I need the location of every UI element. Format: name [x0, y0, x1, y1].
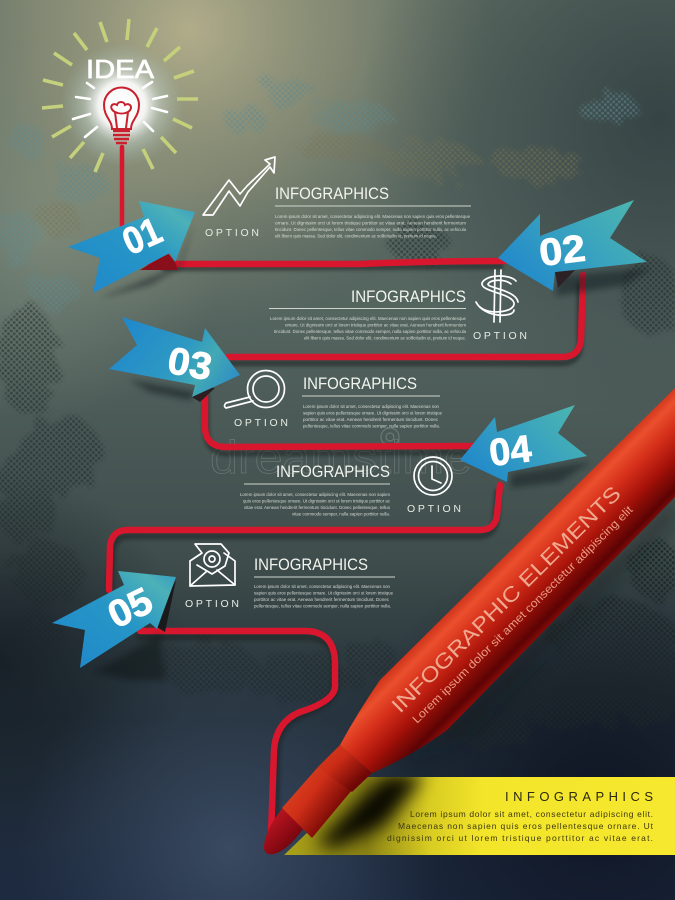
body text: elit libero quis massa. Sed dolor elit, condimentum ac sollicitudin ut, pretium id neque.: [275, 234, 437, 240]
body text: tincidunt. Donec pellentesque, tellus vitae commodo semper, nulla sapien porttitor nulla, ac vehicula: [275, 227, 466, 233]
idea word: IDEA: [86, 54, 155, 84]
arrow 05: 05: [102, 580, 159, 637]
arrow 04: [460, 405, 590, 488]
body text: vitae commodo semper, nulla sapien porttitor nulla.: [292, 512, 390, 518]
body text: [240, 492, 390, 518]
body text: [303, 404, 442, 430]
body text: Lorem ipsum dolor sit amet, consectetur adipiscing elit. Maecenas non: [254, 584, 390, 590]
body text: ornare. Ut dignissim orci ut lorem tristique porttitor ac vitae erat. Aenean hendrerit fermentum: [285, 322, 466, 328]
body text: tincidunt. Donec pellentesque, tellus vitae commodo semper, nulla sapien porttitor nulla, ac vehicula: [274, 329, 466, 335]
callout: yellow band: [284, 775, 675, 855]
arrow 01: [68, 201, 195, 298]
body text: sapien quis eros pellentesque ornare. Ut dignissim orci ut lorem tristique: [303, 410, 442, 416]
panel: option 05: [185, 544, 395, 610]
body text: sapien quis eros pellentesque ornare. Ut dignissim orci ut lorem tristique: [254, 590, 393, 596]
marker pen: [264, 388, 675, 854]
option label: OPTION: [407, 503, 461, 515]
pen nib: [264, 808, 303, 854]
pen lower barrel: [282, 767, 352, 838]
pen subtitle: Lorem ipsum dolor sit amet consectetur adipiscing elit: [411, 504, 636, 726]
option label: OPTION: [205, 227, 259, 239]
panel: option 03: [224, 370, 442, 430]
white rays: [73, 82, 167, 137]
icon: rising arrow: [203, 157, 275, 215]
idea light bulb: [42, 19, 198, 172]
line from bulb: [120, 147, 124, 230]
body text: Lorem ipsum dolor sit amet, consectetur adipiscing elit. Maecenas non sapien: [240, 492, 390, 498]
heading: INFOGRAPHICS: [254, 556, 368, 574]
heading: INFOGRAPHICS: [303, 375, 417, 393]
body text: Lorem ipsum dolor sit amet, consectetur adipiscing elit. Maecenas non: [303, 404, 439, 410]
icon: clock: [414, 457, 452, 495]
red marker line: [109, 147, 583, 835]
option label: OPTION: [234, 417, 288, 429]
body text: [275, 214, 470, 240]
icon: envelope: [190, 544, 235, 586]
line shadow: [110, 266, 580, 825]
option label: OPTION: [473, 330, 527, 342]
callout text: dignissim orci ut lorem tristique porttitor ac vitae erat.: [387, 833, 653, 843]
callout text: Lorem ipsum dolor sit amet, consectetur adipiscing elit.: [410, 809, 653, 819]
body text: [270, 316, 466, 342]
arrow 01: 01: [117, 210, 168, 264]
pen body: [340, 388, 675, 773]
pen title: INFOGRAPHIC ELEMENTS: [387, 482, 626, 718]
body text: pellentesque, tellus vitae commodo semper, nulla sapien porttitor nulla.: [254, 604, 391, 610]
body text: vitae erat. Aenean hendrerit fermentum tincidunt. Donec pellentesque, tellus: [244, 505, 390, 511]
pen collar: [318, 745, 372, 792]
arrow 05: [52, 571, 176, 680]
heading: INFOGRAPHICS: [275, 185, 389, 203]
arrow 02: [498, 200, 650, 296]
bulb outline: [104, 88, 139, 143]
body text: Lorem ipsum dolor sit amet, consectetur adipiscing elit. Maecenas non sapien quis eros pellentesque: [275, 214, 470, 220]
yellow rays: [42, 19, 198, 172]
line: [109, 261, 583, 835]
heading: INFOGRAPHICS: [351, 288, 466, 306]
arrow 02: 02: [537, 228, 588, 275]
option label: OPTION: [185, 598, 239, 610]
heading: INFOGRAPHICS: [276, 463, 390, 481]
panel: option 04: [240, 457, 461, 518]
panel: option 01: [203, 157, 471, 240]
body text: quis eros pellentesque ornare. Ut dignissim orci ut lorem tristique porttitor ac: [243, 498, 390, 504]
body text: elit libero quis massa. Sed dolor elit, condimentum ac sollicitudin ut, pretium id neque.: [304, 336, 466, 342]
icon: magnifying glass: [224, 370, 284, 408]
body text: pellentesque, tellus vitae commodo semper, nulla sapien porttitor nulla.: [303, 424, 440, 430]
callout text: Maecenas non sapien quis eros pellentesque ornare. Ut: [398, 821, 654, 831]
body text: Lorem ipsum dolor sit amet, consectetur adipiscing elit. Maecenas non sapien quis eros pellentesque: [270, 316, 466, 322]
callout heading: INFOGRAPHICS: [505, 789, 653, 804]
arrow 04: 04: [487, 428, 534, 475]
callout text: [387, 809, 654, 843]
body text: [254, 584, 393, 610]
body text: porttitor ac vitae erat. Aenean hendrerit fermentum tincidunt. Donec: [303, 417, 439, 423]
body text: ornare. Ut dignissim orci ut lorem tristique porttitor ac vitae erat. Aenean hendrerit fermentum: [275, 220, 466, 226]
panel: option 02: [269, 270, 527, 342]
body text: porttitor ac vitae erat. Aenean hendrerit fermentum tincidunt. Donec: [254, 597, 390, 603]
watermark: dreamstime: [210, 431, 472, 483]
pen shadow: [390, 497, 675, 772]
arrow 03: [109, 317, 240, 402]
arrow 03: 03: [164, 340, 215, 389]
icon: dollar sign: [476, 270, 518, 322]
